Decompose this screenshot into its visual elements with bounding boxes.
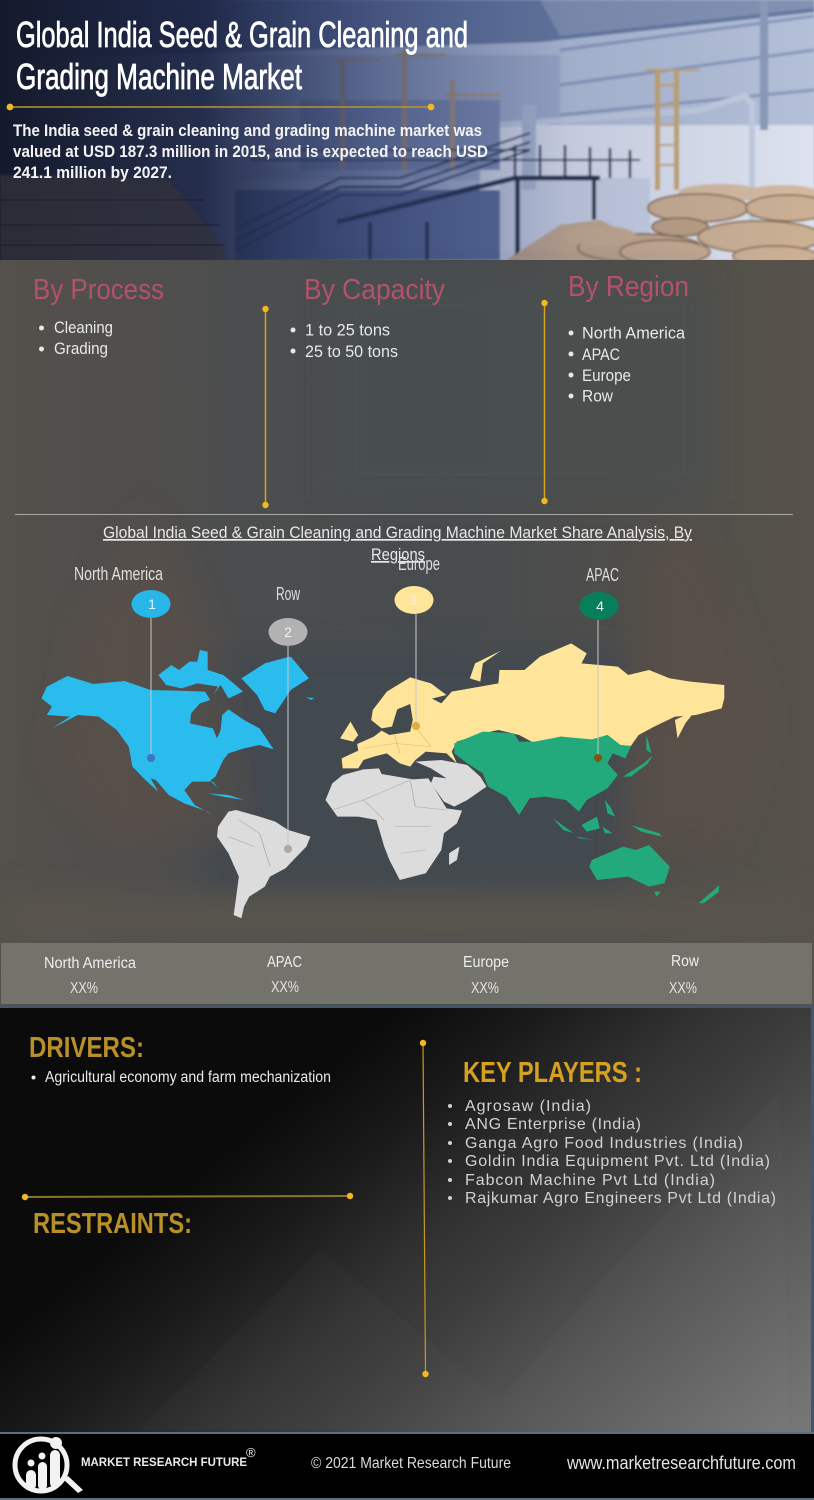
pin 2: Row: Row: [276, 584, 301, 604]
brand name: [81, 1445, 256, 1469]
list: process segments: [39, 318, 113, 358]
table: regional market share: APAC: [267, 954, 302, 971]
list: key players: Fabcon Machine Pvt Ltd (India): [465, 1172, 715, 1189]
panel: hero photo of seed cleaning plant: [0, 0, 814, 280]
table: regional market share: [1, 943, 812, 1004]
hero description: 241.1 million by 2027.: [13, 164, 172, 182]
sacks piled bottom right: [505, 184, 814, 266]
list: capacity segments: 25 to 50 tons: [305, 342, 398, 361]
list: region segments: Row: [582, 386, 614, 406]
heading: By Region: By Region: [568, 271, 689, 303]
pin 4: APAC: [580, 565, 619, 762]
list: key players: ANG Enterprise (India): [465, 1116, 641, 1133]
pin 2: Row: [268, 584, 308, 853]
table: regional market share: XX%: [669, 980, 697, 997]
table: regional market share: North America: [44, 955, 136, 972]
heading: By Capacity: By Capacity: [304, 274, 445, 306]
icon: Market Research Future logo: [15, 1437, 83, 1493]
table: regional market share: Europe: [463, 954, 509, 971]
hero divider: [7, 104, 434, 110]
hero title: Global India Seed & Grain Cleaning and: [16, 14, 468, 55]
heading: Restraints: RESTRAINTS:: [33, 1208, 192, 1240]
pin 3: Europe: 3: [409, 592, 417, 608]
panel: drivers, restraints and key players: [0, 1005, 814, 1433]
list: process segments: Grading: [54, 339, 108, 358]
divider: capacity and region: [541, 300, 548, 504]
copyright: © 2021 Market Research Future: [311, 1455, 511, 1472]
list: capacity segments: 1 to 25 tons: [305, 320, 390, 340]
hero description: valued at USD 187.3 million in 2015, and is expected to reach USD: [13, 143, 488, 161]
pin 3: Europe: [394, 554, 440, 730]
pin 1: North America: [74, 564, 170, 762]
list: region segments: North America: [582, 324, 686, 342]
heading: Key Players: KEY PLAYERS :: [463, 1057, 642, 1089]
table: regional market share: Row: [671, 953, 700, 970]
heading: Drivers: DRIVERS:: [29, 1032, 144, 1064]
pin 2: Row: 2: [284, 624, 292, 640]
table: regional market share: XX%: [471, 980, 499, 997]
list: drivers: Agricultural economy and farm mechanization: [45, 1069, 331, 1086]
pin 1: North America: 1: [148, 596, 156, 612]
list: capacity segments: [290, 320, 398, 361]
region: Europe and Russia: [340, 643, 724, 768]
brand name: MARKET RESEARCH FUTURE: [81, 1455, 247, 1469]
pin 4: APAC: 4: [596, 598, 604, 614]
brand name: ®: [246, 1445, 256, 1460]
list: key players: Ganga Agro Food Industries (India): [465, 1135, 743, 1152]
region: Rest of World: [217, 760, 486, 918]
table: regional market share: XX%: [70, 980, 98, 997]
list: process segments: Cleaning: [54, 318, 113, 337]
map: world regions: [42, 643, 724, 918]
pin 1: North America: North America: [74, 564, 164, 584]
divider: process and capacity: [262, 306, 269, 508]
hero title: Grading Machine Market: [16, 56, 302, 97]
footer bar: [0, 1432, 814, 1500]
hero description: [13, 122, 488, 182]
heading: By Process: By Process: [33, 274, 164, 306]
pin 3: Europe: Europe: [398, 554, 440, 574]
list: key players: Goldin India Equipment Pvt. Ltd (India): [465, 1153, 770, 1170]
chart heading: market share analysis: [103, 523, 692, 564]
table: regional market share: XX%: [271, 979, 299, 996]
divider: drivers and restraints: [22, 1193, 353, 1200]
pin 4: APAC: APAC: [586, 565, 619, 585]
hero description: The India seed & grain cleaning and grading machine market was: [13, 122, 482, 140]
list: key players: [448, 1098, 776, 1207]
website: www.marketresearchfuture.com: [566, 1453, 796, 1473]
list: key players: Rajkumar Agro Engineers Pvt Ltd (India): [465, 1190, 776, 1207]
chart heading: market share analysis: Global India Seed & Grain Cleaning and Grading Machine Market Share Analysis, By: [103, 523, 692, 542]
list: key players: Agrosaw (India): [465, 1098, 591, 1115]
list: region segments: APAC: [582, 345, 620, 364]
chart heading: market share analysis: Regions: [371, 545, 425, 564]
panel: segments and map background: [0, 260, 814, 1006]
list: region segments: [568, 324, 686, 406]
hero title: [16, 14, 468, 97]
region: North America: [42, 650, 314, 815]
region: Asia Pacific: [454, 732, 719, 903]
divider: drivers and key players: [420, 1040, 429, 1377]
list: region segments: Europe: [582, 366, 631, 385]
